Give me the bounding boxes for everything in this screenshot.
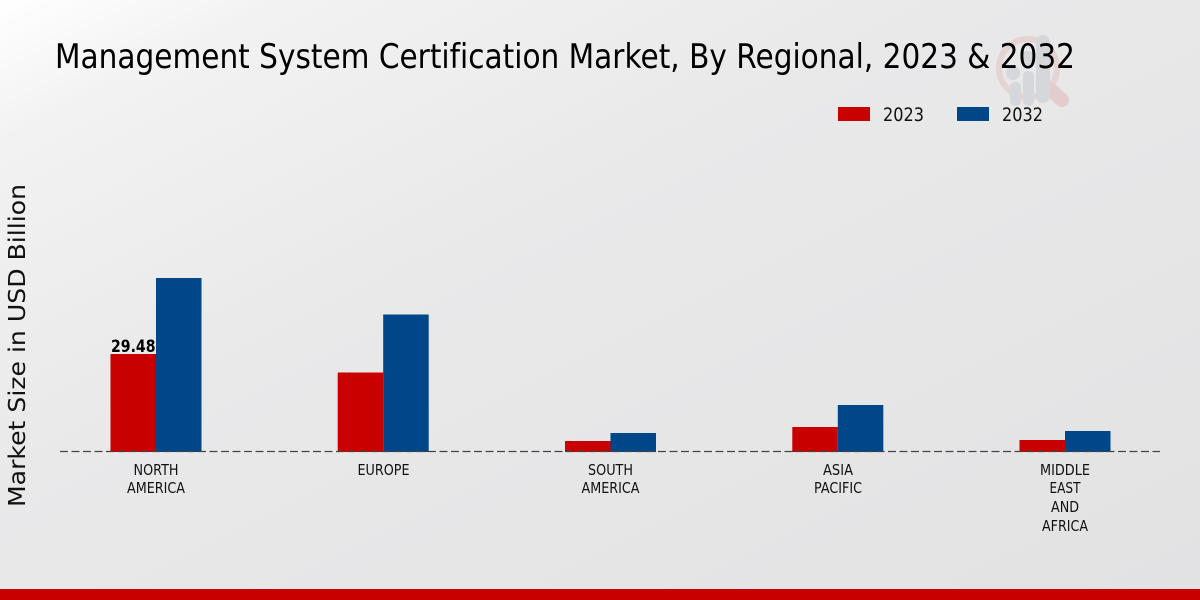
legend: 2032: 2032 <box>1002 105 1043 126</box>
label: North America: AMERICA <box>127 479 185 497</box>
label: Europe: EUROPE <box>358 461 410 479</box>
bar chart <box>60 278 1160 452</box>
legend: 2023 <box>838 105 924 126</box>
label: Middle East and Africa: AND <box>1051 498 1079 516</box>
label: Asia Pacific: ASIA <box>823 461 853 479</box>
label: Asia Pacific: PACIFIC <box>814 479 862 497</box>
label: Middle East and Africa: AFRICA <box>1042 517 1088 535</box>
legend: 2032 <box>957 105 1043 126</box>
legend: 2023: 2023 <box>883 105 924 126</box>
bars: Asia Pacific <box>792 405 883 452</box>
bars: North America <box>110 278 202 452</box>
legend <box>838 105 1043 126</box>
bars: Europe <box>338 314 429 452</box>
data label: 29.48: 29.48 <box>111 337 156 356</box>
y axis label: Market Size in USD Billion <box>3 184 31 507</box>
label: Middle East and Africa: EAST <box>1050 479 1081 497</box>
bars: Middle East and Africa <box>1020 431 1110 452</box>
footer bar <box>0 589 1200 600</box>
label: South America: SOUTH <box>588 461 633 479</box>
category labels <box>127 461 1090 535</box>
label: North America: NORTH <box>134 461 178 479</box>
label: South America: AMERICA <box>582 479 640 497</box>
bars: South America <box>565 433 656 452</box>
icon: magnifier watermark <box>999 35 1062 106</box>
baseline axis <box>60 450 1160 452</box>
title: Management System Certification Market, By Regional, 2023 & 2032 <box>55 37 1075 77</box>
label: Middle East and Africa: MIDDLE <box>1040 461 1090 479</box>
